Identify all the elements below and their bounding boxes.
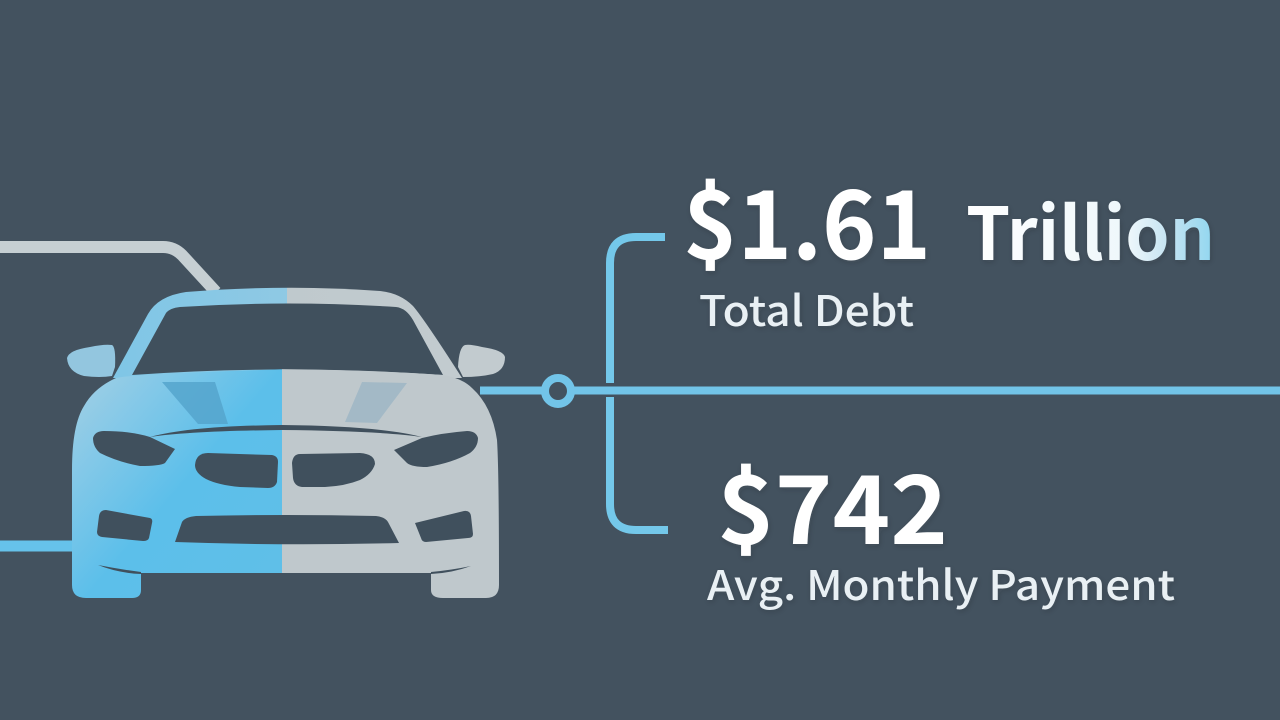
right fog lamp [415,511,473,542]
icon: car front view [67,288,505,598]
bracket connecting the two statistics [610,237,668,530]
value: $742: $742 [717,435,948,572]
statistic: average monthly payment [707,435,1175,612]
car left mirror [67,345,115,377]
unit: Trillion: Trillion [966,176,1215,282]
hood shading right [345,382,407,423]
label: Avg. Monthly Payment: Avg. Monthly Payment [707,552,1175,612]
bumper left slit [98,565,141,574]
right headlight [394,431,478,467]
car body right half [275,369,499,598]
horizontal timeline with node [480,378,1280,404]
statistic: total debt [683,150,1215,339]
value: $1.61: $1.61 [683,150,931,287]
blue connector line at car's lower left [0,540,80,552]
left fog lamp [97,510,152,541]
left headlight [93,431,175,466]
right grille [292,453,375,487]
hood crease line [150,425,422,437]
label: Total Debt: Total Debt [699,278,914,339]
windshield [132,304,443,375]
car right mirror [458,345,505,377]
lower air intake [175,515,399,544]
grey connector line into car roof [0,247,216,292]
bumper right slit [431,566,471,574]
car roof and window frame [113,288,462,378]
car body left half [72,369,290,598]
hood shading left [162,382,228,424]
left grille [195,453,278,488]
